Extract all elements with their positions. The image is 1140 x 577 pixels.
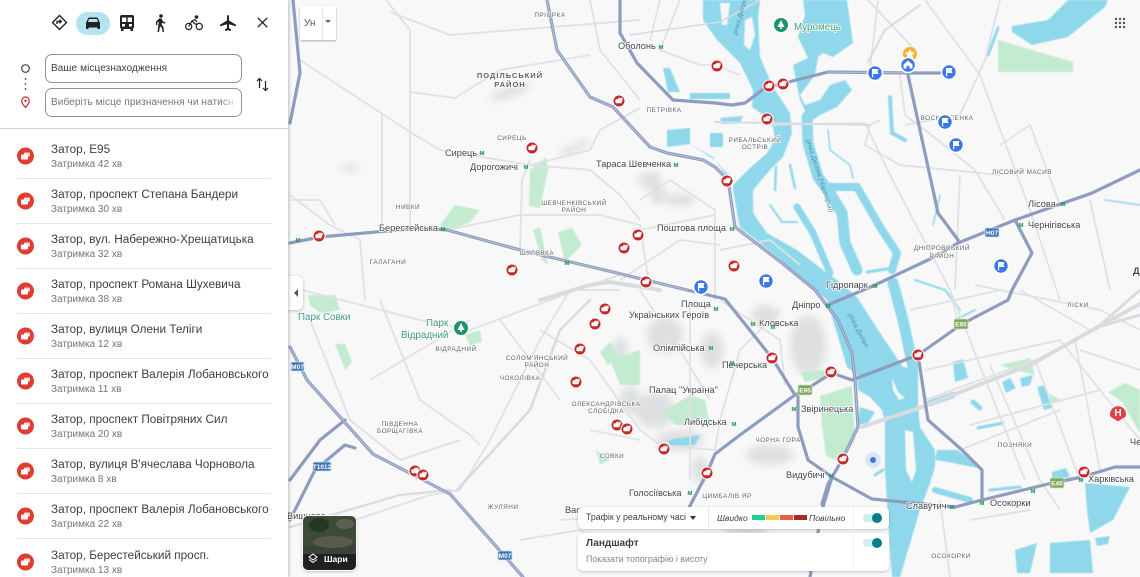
district labels: СИРЕЦЬ [497, 135, 527, 142]
district labels: ШУЛЯВКА [520, 250, 554, 257]
road shields: H07 [986, 230, 998, 237]
icon: home pin [900, 58, 916, 72]
metro markers: м [440, 226, 446, 233]
list item: Затримка 12 хв [51, 338, 122, 350]
place labels: Осокорки [990, 498, 1030, 508]
terrain title: Ландшафт [586, 538, 639, 549]
route stops icon [21, 64, 30, 108]
road shields: T1012 [313, 464, 332, 471]
metro markers: м [1030, 488, 1036, 495]
language control: Ун [304, 18, 315, 29]
road shields: M07 [499, 553, 512, 560]
park labels [298, 22, 841, 341]
district labels: ПОЗНЯКИ [998, 442, 1032, 449]
list item [17, 502, 271, 539]
divider [708, 507, 709, 529]
language control [300, 6, 336, 40]
icon: bicycle [185, 15, 203, 30]
current location dot [865, 452, 881, 468]
list item: Затор, проспект Валерія Лобановського [51, 368, 269, 380]
icon: close [257, 17, 268, 28]
place labels: Чернігівська [1028, 220, 1081, 230]
place labels: Харківська [1088, 474, 1135, 484]
list item: Затор, проспект Романа Шухевича [51, 278, 240, 290]
list item: Затор, E95 [51, 142, 110, 156]
metro markers: м [708, 345, 714, 352]
place labels: Олімпійська [653, 343, 706, 353]
place labels: Дніпро [792, 300, 821, 310]
list item [17, 548, 209, 576]
place labels: Звіринецька [801, 404, 854, 414]
icon: car selected [76, 12, 110, 35]
layers thumbnail [303, 516, 356, 570]
place labels: Площа [681, 299, 712, 309]
metro markers: м [770, 324, 776, 331]
list item [17, 232, 271, 269]
metro markers: м [673, 162, 679, 169]
river labels [731, 0, 871, 349]
list item [17, 412, 271, 449]
place labels: Голосіївська [629, 488, 682, 498]
metro markers: м [1078, 477, 1084, 484]
harbour [710, 133, 723, 147]
river labels: річка Десена (Чорторий) [804, 137, 835, 214]
place labels: Либідська [684, 417, 727, 427]
left bank lakes [1085, 483, 1130, 533]
place labels: Д [1133, 266, 1140, 276]
highways [290, 0, 1140, 577]
place labels: Вишнева [287, 511, 327, 521]
district labels: ЧОРНА ГОРА [755, 437, 801, 444]
panel: traffic legend [578, 507, 889, 529]
upper Desna lagoon [793, 0, 853, 122]
icon: swap [256, 78, 268, 92]
place labels: Українських Героїв [629, 310, 709, 320]
metro markers: м [949, 504, 955, 511]
district labels: РАЙОН [562, 205, 586, 214]
obolon lakes [663, 68, 680, 92]
district labels [370, 12, 1089, 560]
list item [17, 368, 271, 404]
road shields: E95 [799, 388, 811, 394]
icon: walk [156, 14, 166, 32]
list item [17, 142, 271, 179]
district labels: НИВКИ [396, 204, 420, 211]
speed legend: Повільно [809, 513, 845, 523]
traffic jam list [17, 142, 271, 576]
district labels: ОЛЕКСАНДРІВСЬКА [571, 401, 641, 408]
list item [17, 458, 271, 494]
metro markers: м [295, 237, 301, 244]
district labels: РАЙОН [930, 251, 954, 260]
place labels: Поштова площа [657, 223, 727, 233]
place labels: Гідропарк [826, 280, 869, 290]
terrain subtitle: Показати топографію і висоту [586, 554, 708, 564]
traffic dropdown arrow [690, 516, 696, 520]
road shields: E95 [955, 322, 967, 328]
hillshade relief [341, 80, 826, 538]
river branches [770, 28, 1140, 500]
park labels: Парк Совки [298, 312, 350, 323]
list item [17, 322, 271, 359]
list item: Затримка 20 хв [51, 428, 122, 440]
place labels [287, 41, 1140, 521]
list item: Затримка 13 хв [51, 564, 122, 576]
place labels: Славутич [906, 501, 947, 511]
divider [853, 507, 854, 529]
list item: Затор, вул. Набережно-Хрещатицька [51, 232, 254, 246]
place labels: Видубичі [786, 470, 825, 480]
minor roads [290, 0, 1140, 577]
list item [17, 188, 271, 224]
light railway and bridge corridors [290, 0, 1140, 527]
metro markers: м [791, 406, 797, 413]
metro markers: м [750, 321, 756, 328]
district labels: ЛІСКИ [1067, 302, 1089, 309]
icon: hospital pin [1110, 406, 1126, 422]
place labels: Палац "Україна" [649, 385, 718, 395]
road shields: E40 [1051, 480, 1063, 488]
metro markers: м [1018, 222, 1024, 229]
panel: terrain [578, 533, 889, 571]
layers thumbnail: Шари [324, 554, 348, 564]
district labels: ПЕТРІВКА [646, 107, 682, 114]
metro markers: м [828, 473, 834, 480]
panel: sidebar [0, 0, 288, 577]
district labels: ЖУЛЯНИ [488, 504, 518, 511]
icon: apps grid [1114, 18, 1126, 28]
origin input: Ваше місцезнаходження [51, 63, 167, 74]
header divider [0, 128, 288, 129]
district labels: БОРЩАГІВКА [377, 428, 423, 435]
park labels: Відрадний [401, 330, 448, 341]
top right lake [1012, 0, 1108, 45]
place labels: Тараса Шевченка [596, 159, 672, 169]
district labels: ЦИМБАЛІВ ЯР [702, 493, 752, 500]
list item: Затор, Берестейський просп. [51, 548, 209, 562]
district labels: ПІВДЕННА [382, 421, 419, 428]
metro markers: м [479, 150, 485, 157]
list item: Затримка 38 хв [51, 294, 122, 304]
place labels: Кловська [759, 318, 799, 328]
list item: Затор, проспект Повітряних Сил [51, 412, 227, 426]
metro markers: м [731, 421, 737, 428]
icon: best route [52, 14, 68, 30]
icon: plane [220, 15, 236, 31]
district labels: ОСТРІВ [742, 144, 768, 151]
road shields [291, 228, 1064, 560]
collapse sidebar button [288, 276, 303, 310]
icon: hospital pin: H [1114, 408, 1122, 419]
metro markers: м [658, 44, 664, 51]
metro markers: м [564, 260, 570, 267]
water [663, 0, 1130, 577]
place labels: Вас [565, 505, 581, 515]
district labels: ВІДРАДНИЙ [435, 344, 477, 353]
Dnipro river main channel [667, 0, 935, 577]
list item: Затор, проспект Степана Бандери [51, 188, 238, 200]
river islands [720, 3, 916, 482]
traffic jam markers [313, 60, 1090, 481]
district labels: ЧОКОЛІВКА [500, 375, 540, 382]
district labels: ПОДІЛЬСЬКИЙ [477, 71, 543, 80]
list item: Затримка 32 хв [51, 248, 122, 260]
place labels: Оболонь [618, 41, 656, 51]
river labels: річка Дніпро [846, 311, 871, 349]
list item: Затримка 30 хв [51, 204, 122, 214]
destination input: Виберіть місце призначення чи натисн [51, 97, 234, 108]
metro markers: м [729, 226, 735, 233]
place labels: Берестейська [379, 223, 439, 233]
list item: Затор, проспект Валерія Лобановського [51, 502, 269, 516]
place labels: Дорогожичі [470, 162, 518, 172]
list item: Затор, вулиця В'ячеслава Чорновола [51, 458, 255, 470]
list item: Затор, вулиця Олени Теліги [51, 322, 202, 336]
divider [853, 533, 854, 571]
terrain toggle [863, 538, 882, 548]
district labels: ОСОКОРКИ [931, 553, 971, 560]
district labels: ПРІОРКА [534, 12, 566, 19]
district labels: ЛІСОВИЙ МАСИВ [992, 167, 1052, 176]
metro markers: м [979, 500, 985, 507]
list item: Затримка 22 хв [51, 518, 122, 530]
district labels: СОВКИ [600, 453, 624, 460]
road shields: M07 [291, 364, 304, 371]
traffic toggle [863, 513, 882, 523]
place labels: Лісова [1028, 199, 1057, 209]
metro markers: м [1060, 201, 1066, 208]
travel mode tabs [52, 12, 268, 35]
metro markers: м [825, 303, 831, 310]
icon: star pin [903, 47, 917, 61]
icon: transit [120, 15, 134, 31]
district labels: РИБАЛЬСЬКИЙ [729, 135, 781, 144]
metro markers: м [872, 283, 878, 290]
icon: tree pin Muromets [774, 18, 788, 32]
parks [308, 40, 1140, 465]
list item: Затримка 11 хв [51, 384, 121, 394]
metro markers: м [523, 164, 529, 171]
speed legend: Швидко [717, 513, 748, 523]
metro markers [295, 44, 1084, 511]
district labels: РАЙОН [494, 80, 526, 89]
origin input [45, 54, 242, 83]
speed legend [717, 513, 845, 523]
metro markers: м [729, 360, 735, 367]
traffic layer label: Трафік у реальному часі [586, 512, 686, 522]
place labels: Печерська [722, 360, 768, 370]
icon: tree pin Vidradnyi [454, 320, 468, 336]
metro markers: м [713, 306, 719, 313]
destination input [45, 88, 242, 117]
district labels: ДНІПРОВСЬКИЙ [914, 243, 970, 252]
district labels: СОЛОМ'ЯНСЬКИЙ [506, 353, 568, 362]
place labels: Сирець [445, 148, 477, 158]
park labels: Муромець [794, 22, 841, 33]
metro markers: м [687, 490, 693, 497]
district labels: ВОСКРЕСЕНКА [921, 115, 974, 122]
list item [17, 278, 271, 314]
district labels: ШЕВЧЕНКІВСЬКИЙ [541, 198, 607, 207]
park labels: Парк [426, 318, 449, 329]
blue place pins [694, 64, 1008, 294]
district labels: СЛОБІДКА [588, 408, 624, 415]
district labels: РАЙОН [525, 360, 549, 369]
list item: Затримка 42 хв [51, 158, 122, 170]
list item: Затримка 8 хв [51, 474, 117, 484]
district labels: ГАЛАГАНИ [370, 259, 406, 266]
